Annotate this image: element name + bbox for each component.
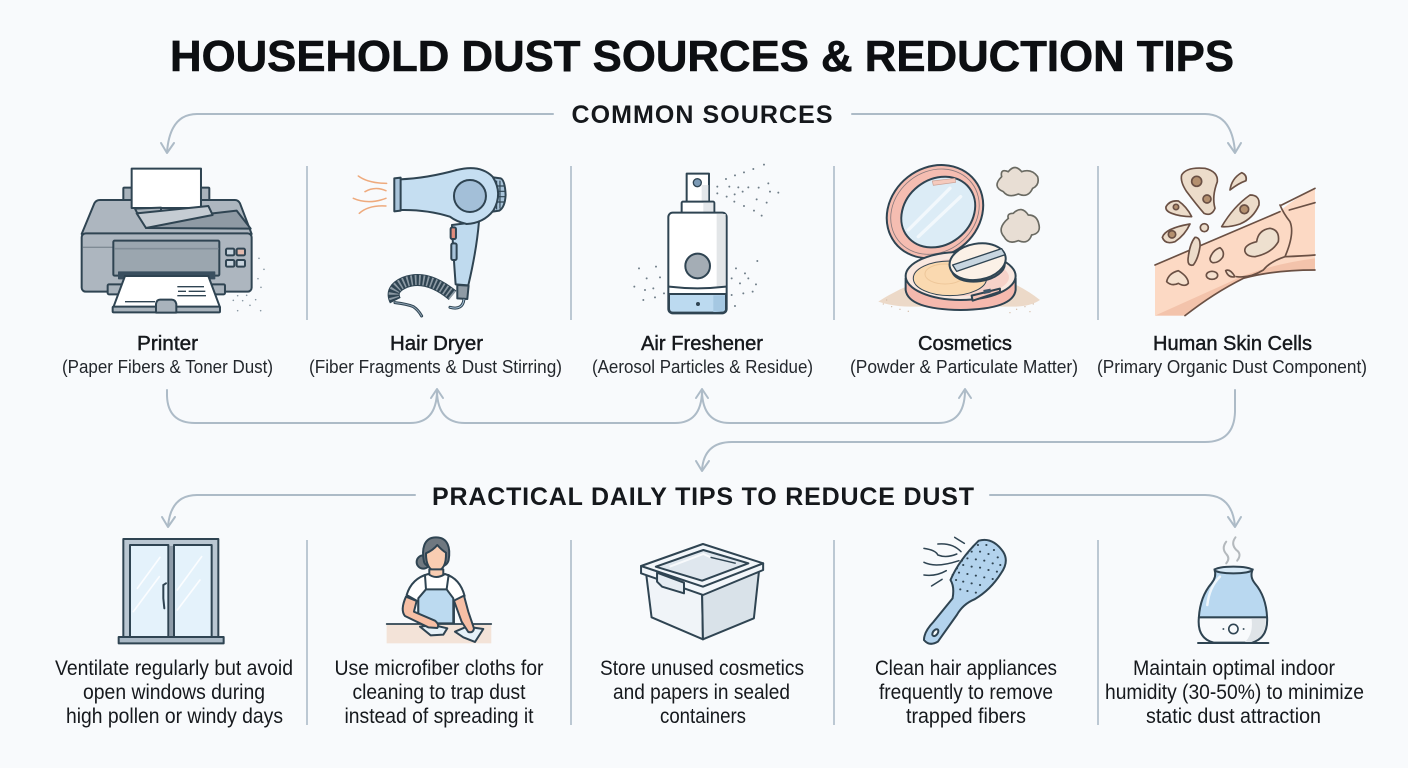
arrow: skin cells to tips	[696, 390, 1235, 471]
arrow: printer to hair dryer	[167, 389, 443, 423]
tip: ventilate: high pollen or windy days	[66, 705, 283, 728]
tip: humidity: humidity (30-50%) to minimize	[1105, 681, 1364, 704]
tip: microfiber cloths: cleaning to trap dust	[352, 681, 526, 704]
tip: ventilate	[55, 657, 293, 728]
tip: sealed containers: and papers in sealed	[613, 681, 790, 704]
tip: clean hair appliances: trapped fibers	[906, 705, 1026, 728]
label: human skin cells	[1097, 333, 1367, 377]
tip: humidity: Maintain optimal indoor	[1133, 657, 1335, 680]
icon: cosmetics compact	[868, 146, 1040, 313]
tip: sealed containers: Store unused cosmetics	[600, 657, 804, 680]
icon: air freshener	[634, 165, 778, 313]
tip: clean hair appliances: frequently to remove	[879, 681, 1053, 704]
arrow: hair dryer to air freshener	[437, 389, 708, 423]
tip: ventilate: Ventilate regularly but avoid	[55, 657, 293, 680]
label: hair dryer	[309, 333, 562, 377]
tip: microfiber cloths: instead of spreading it	[344, 705, 534, 728]
label: cosmetics: Cosmetics	[918, 333, 1012, 355]
label: hair dryer: (Fiber Fragments & Dust Stirring)	[309, 356, 562, 377]
tip: humidity: static dust attraction	[1146, 705, 1321, 728]
label: air freshener: (Aerosol Particles & Residue)	[592, 356, 813, 377]
icon: window	[119, 539, 224, 643]
tip: microfiber cloths	[334, 657, 544, 728]
label: printer	[62, 333, 273, 377]
title: HOUSEHOLD DUST SOURCES & REDUCTION TIPS	[170, 32, 1234, 81]
tip: ventilate: open windows during	[83, 681, 265, 704]
arrow: common sources to right	[852, 114, 1241, 153]
arrow: common sources to left	[161, 114, 553, 153]
tip: clean hair appliances	[875, 657, 1057, 728]
tip: sealed containers	[600, 657, 804, 728]
label: cosmetics: (Powder & Particulate Matter)	[850, 356, 1078, 377]
icon: humidifier	[1198, 537, 1268, 643]
label: cosmetics	[850, 333, 1078, 377]
icon: person cleaning	[387, 537, 491, 643]
tip: clean hair appliances: Clean hair appliances	[875, 657, 1057, 680]
icon: printer	[82, 169, 264, 313]
label: hair dryer: Hair Dryer	[390, 333, 483, 355]
arrow: air freshener to cosmetics	[702, 389, 971, 423]
arrow: tips to left	[162, 495, 415, 527]
label: printer: (Paper Fibers & Toner Dust)	[62, 356, 273, 377]
arrow: tips to right	[990, 495, 1241, 527]
label: air freshener	[592, 333, 813, 377]
heading: common sources: COMMON SOURCES	[572, 101, 832, 129]
icon: hair brush	[924, 537, 1006, 644]
icon: hair dryer	[353, 168, 506, 316]
tip: sealed containers: containers	[660, 705, 746, 728]
label: air freshener: Air Freshener	[641, 333, 763, 355]
tip: microfiber cloths: Use microfiber cloths for	[334, 657, 544, 680]
tip: humidity	[1105, 657, 1364, 728]
icon: human skin cells	[1155, 168, 1315, 316]
label: human skin cells: Human Skin Cells	[1153, 333, 1312, 355]
icon: storage container	[641, 544, 763, 639]
label: human skin cells: (Primary Organic Dust Component)	[1097, 356, 1367, 377]
label: printer: Printer	[137, 333, 198, 355]
heading: practical tips: PRACTICAL DAILY TIPS TO REDUCE DUST	[432, 483, 974, 511]
